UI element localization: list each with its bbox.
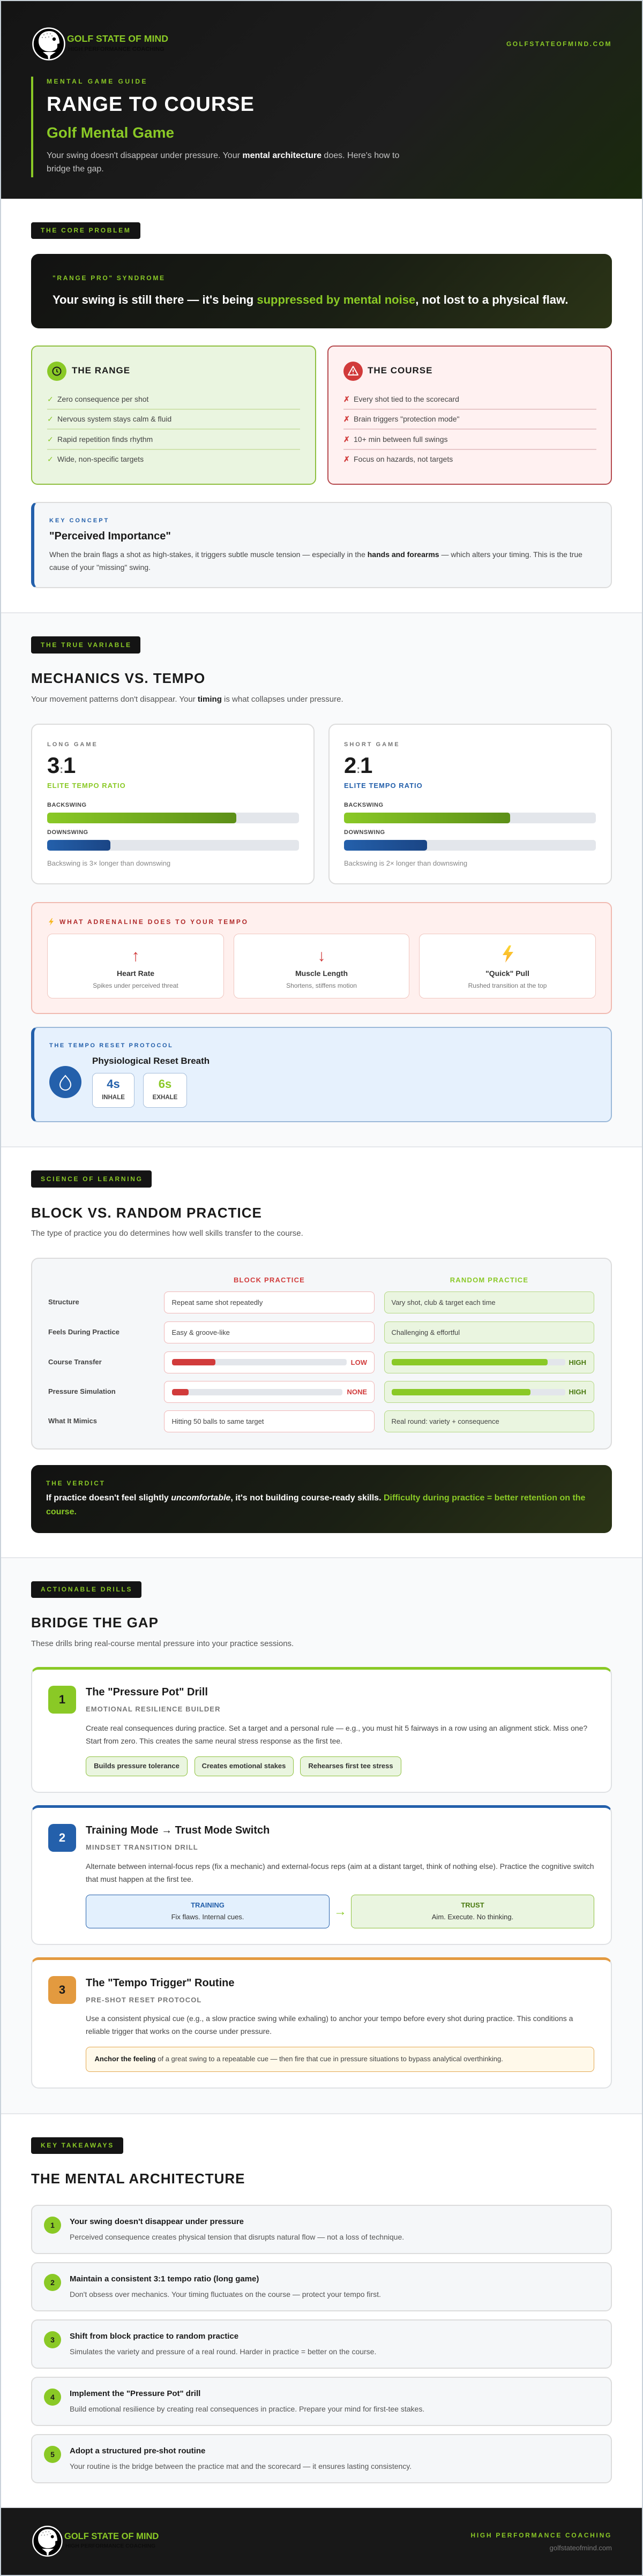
row: feels during practice: Challenging & effortful: [391, 1328, 460, 1336]
training mode box: TRAINING: [191, 1901, 225, 1909]
drill subtitle: PRE-SHOT RESET PROTOCOL: [86, 1996, 201, 2004]
chip: Builds pressure tolerance: [94, 1762, 180, 1770]
drill title: The "Pressure Pot" Drill: [86, 1686, 208, 1698]
cross list: [343, 395, 459, 463]
stat: inhale: 4s: [107, 1077, 120, 1091]
label: THE VERDICT: [46, 1479, 106, 1487]
number badge: [48, 1824, 76, 1852]
cross list: Focus on hazards, not targets: [354, 455, 453, 463]
trust mode box: [351, 1895, 594, 1928]
column header: random: RANDOM PRACTICE: [450, 1276, 528, 1284]
drill 1: [31, 1667, 612, 1793]
callout statement: Your swing is still there — it's being suppressed by mental noise, not lost to a physical flaw.: [53, 293, 568, 306]
panel title: THE RANGE: [72, 365, 130, 375]
ratio caption: ELITE TEMPO RATIO: [344, 782, 423, 790]
takeaway 1: 1: [50, 2221, 55, 2229]
heading: THE MENTAL ARCHITECTURE: [31, 2171, 245, 2187]
card: heart rate: [47, 934, 224, 998]
panel title: WHAT ADRENALINE DOES TO YOUR TEMPO: [59, 918, 249, 926]
takeaway 5: Your routine is the bridge between the practice mat and the scorecard — it ensures lasting consistency.: [70, 2462, 412, 2470]
takeaway 3: [31, 2319, 612, 2369]
number badge: 2: [59, 1831, 65, 1844]
kicker: MENTAL GAME GUIDE: [47, 78, 148, 85]
takeaway 4: 4: [50, 2393, 55, 2401]
logo: [32, 27, 168, 61]
section tag: [31, 1170, 152, 1188]
trust mode box: Aim. Execute. No thinking.: [432, 1913, 513, 1921]
check list: [47, 395, 171, 463]
section tag: THE TRUE VARIABLE: [41, 641, 132, 649]
takeaway 5: 5: [50, 2450, 55, 2459]
statement: If practice doesn't feel slightly uncomfortable, it's not building course-ready skills. Difficulty during practice = better retention on the: [46, 1493, 585, 1503]
takeaway 5: Adopt a structured pre-shot routine: [70, 2446, 205, 2455]
section: the true variable: [1, 612, 642, 1146]
intro text: [47, 151, 399, 174]
panel: the range: [31, 346, 316, 485]
drill 2: [31, 1805, 612, 1945]
takeaway 4: Build emotional resilience by creating real consequences in practice. Prepare your mind for first-tee stakes.: [70, 2405, 424, 2413]
check list: ✓: [47, 435, 54, 444]
section tag: [31, 1581, 141, 1598]
footer logo: [32, 2526, 159, 2557]
row: what it mimics: [48, 1410, 594, 1432]
note: Backswing is 2× longer than downswing: [344, 859, 467, 867]
takeaway 2: 2: [50, 2278, 55, 2287]
main title: RANGE TO COURSE: [47, 93, 255, 116]
logo tagline: HIGH PERFORMANCE COACHING: [65, 2543, 155, 2549]
stat: inhale: [92, 1073, 134, 1108]
stat: inhale: INHALE: [102, 1094, 125, 1101]
intro text: Your swing doesn't disappear under pressure. Your mental architecture does. Here's how to: [47, 151, 399, 160]
cross list: ✗: [343, 455, 350, 463]
drill body: that must happen at the first tee.: [86, 1875, 193, 1883]
section tag: ACTIONABLE DRILLS: [41, 1586, 132, 1593]
card: quick pull: [419, 934, 596, 998]
chip: Rehearses first tee stress: [308, 1762, 393, 1770]
icon: breath drop: [49, 1066, 81, 1098]
card title: Muscle Length: [295, 969, 348, 978]
drill body: Alternate between internal-focus reps (fix a mechanic) and external-focus reps (aim at a distant target, think of nothing else). Practice the cognitive switch: [86, 1862, 594, 1871]
takeaway 1: [31, 2205, 612, 2254]
takeaway 5: [31, 2434, 612, 2483]
cross list: Brain triggers "protection mode": [354, 415, 459, 423]
stat: exhale: 6s: [159, 1077, 171, 1091]
note: Backswing is 3× longer than downswing: [47, 859, 170, 867]
website link: GOLFSTATEOFMIND.COM: [506, 40, 612, 48]
section: science of learning: [1, 1146, 642, 1557]
row: what it mimics: Real round: variety + consequence: [391, 1417, 499, 1425]
card title: "Quick" Pull: [485, 969, 529, 978]
check list: ✓: [47, 395, 54, 403]
row: structure: [48, 1291, 594, 1313]
row: pressure simulation: HIGH: [569, 1388, 586, 1396]
row: course transfer: Course Transfer: [48, 1357, 102, 1366]
backswing bar: [47, 813, 299, 823]
body text: cause of your "missing" swing.: [49, 563, 151, 572]
column header: block: BLOCK PRACTICE: [234, 1276, 305, 1284]
drill body: [86, 1862, 594, 1883]
row: course transfer: LOW: [351, 1358, 367, 1366]
cross list: Every shot tied to the scorecard: [354, 395, 459, 403]
intro text: Your movement patterns don't disappear. Your timing is what collapses under pressure.: [31, 695, 343, 704]
row: structure: Vary shot, club & target each time: [391, 1298, 496, 1306]
chip: [194, 1756, 294, 1776]
body text: [49, 550, 582, 572]
icon: clock: [47, 362, 66, 381]
card: muscle length: [234, 934, 409, 998]
comparison table: [31, 1258, 612, 1450]
drill body: Create real consequences during practice. Set a target and a personal rule — e.g., you must hit 5 fairways in a row using an alignment stick. Miss one?: [86, 1724, 587, 1732]
drill body: reliable trigger that works on the course under pressure.: [86, 2027, 272, 2036]
section tag: THE CORE PROBLEM: [41, 227, 131, 234]
row: what it mimics: Hitting 50 balls to same target: [171, 1417, 264, 1425]
icon: golf ball head on tee: [32, 2526, 63, 2557]
check list: Rapid repetition finds rhythm: [57, 435, 153, 444]
section tag: SCIENCE OF LEARNING: [41, 1175, 143, 1183]
footer website: golfstateofmind.com: [550, 2544, 612, 2552]
subtitle: Golf Mental Game: [47, 124, 174, 141]
drill title: Training Mode → Trust Mode Switch: [86, 1824, 270, 1836]
drill 3: [31, 1957, 612, 2089]
panel title: THE COURSE: [368, 365, 432, 375]
label: SHORT GAME: [344, 741, 400, 748]
row: feels during practice: Easy & groove-like: [171, 1328, 230, 1336]
callout: range pro syndrome: [31, 254, 612, 328]
cross list: ✗: [343, 435, 350, 444]
label: THE TEMPO RESET PROTOCOL: [49, 1042, 174, 1049]
intro text: bridge the gap.: [47, 164, 104, 174]
heading: MECHANICS VS. TEMPO: [31, 670, 205, 686]
takeaway 4: Implement the "Pressure Pot" drill: [70, 2389, 200, 2398]
takeaway 3: 3: [50, 2335, 55, 2344]
number badge: 1: [59, 1693, 65, 1706]
row: course transfer: [48, 1351, 594, 1373]
takeaway 2: Maintain a consistent 3:1 tempo ratio (long game): [70, 2274, 259, 2284]
card title: Heart Rate: [117, 969, 154, 978]
takeaway 2: [31, 2262, 612, 2311]
title: Physiological Reset Breath: [92, 1056, 210, 1066]
callout: the verdict: [31, 1465, 612, 1533]
training mode box: [86, 1895, 330, 1928]
intro text: These drills bring real-course mental pressure into your practice sessions.: [31, 1639, 294, 1648]
section: actionable drills: [1, 1557, 642, 2113]
backswing label: BACKSWING: [47, 802, 87, 808]
footer tagline: HIGH PERFORMANCE COACHING: [470, 2532, 612, 2539]
takeaway 3: Simulates the variety and pressure of a real round. Harder in practice = better on the course.: [70, 2347, 376, 2356]
row: course transfer: HIGH: [569, 1358, 586, 1366]
section tag: KEY TAKEAWAYS: [41, 2142, 114, 2149]
row: feels during practice: Feels During Practice: [48, 1328, 119, 1336]
panel: long game tempo: [31, 724, 315, 884]
stat: exhale: [143, 1073, 187, 1108]
drill body: [86, 2014, 573, 2036]
backswing bar: [344, 813, 596, 823]
footer: [1, 2507, 642, 2575]
section tag: [31, 636, 140, 654]
panel: the course: [327, 346, 612, 485]
header: [1, 1, 642, 199]
backswing label: BACKSWING: [344, 802, 384, 808]
row: structure: Structure: [48, 1298, 79, 1306]
icon: arrow down: ↓: [317, 947, 326, 965]
icon: warning: [343, 362, 363, 381]
row: pressure simulation: NONE: [347, 1388, 367, 1396]
ratio: 3:1: [47, 753, 76, 778]
number badge: 3: [59, 1983, 65, 1996]
logo wordmark: GOLF STATE OF MIND: [67, 33, 168, 44]
row: what it mimics: What It Mimics: [48, 1417, 97, 1425]
section: the core problem: [1, 199, 642, 612]
check list: Nervous system stays calm & fluid: [57, 415, 171, 423]
section: key takeaways: [1, 2113, 642, 2507]
drill body: [86, 1724, 587, 1745]
panel: short game tempo: [328, 724, 612, 884]
logo tagline: HIGH PERFORMANCE COACHING: [68, 46, 165, 52]
cross list: ✗: [343, 395, 350, 403]
takeaway 1: Your swing doesn't disappear under pressure: [70, 2217, 244, 2226]
drill title: The "Tempo Trigger" Routine: [86, 1977, 235, 1989]
card text: Spikes under perceived threat: [93, 982, 178, 989]
takeaway 2: Don't obsess over mechanics. Your timing fluctuates on the course — protect your tempo first.: [70, 2290, 381, 2299]
check list: Wide, non-specific targets: [57, 455, 144, 463]
callout label: "RANGE PRO" SYNDROME: [53, 274, 166, 282]
chip: [86, 1756, 188, 1776]
row: pressure simulation: [48, 1381, 594, 1403]
heading: "Perceived Importance": [49, 530, 171, 542]
drill subtitle: EMOTIONAL RESILIENCE BUILDER: [86, 1705, 221, 1713]
downswing bar: [344, 840, 596, 851]
number badge: [48, 1976, 76, 2004]
drill subtitle: MINDSET TRANSITION DRILL: [86, 1843, 198, 1851]
number badge: [48, 1686, 76, 1714]
stat: exhale: EXHALE: [153, 1094, 177, 1101]
chip: [300, 1756, 401, 1776]
drill body: Start from zero. This creates the same neural stress response as the first tee.: [86, 1737, 342, 1745]
icon: lightning bolt: [503, 945, 513, 963]
panel: what adrenaline does: [31, 902, 612, 1014]
label: KEY CONCEPT: [49, 517, 109, 524]
intro text: The type of practice you do determines how well skills transfer to the course.: [31, 1229, 303, 1238]
hero block: [31, 77, 406, 177]
ratio caption: ELITE TEMPO RATIO: [47, 782, 126, 790]
cross list: 10+ min between full swings: [354, 435, 448, 444]
row: feels during practice: [48, 1321, 594, 1343]
downswing label: DOWNSWING: [47, 829, 88, 836]
check list: Zero consequence per shot: [57, 395, 148, 403]
takeaway 3: Shift from block practice to random practice: [70, 2332, 238, 2341]
row: structure: Repeat same shot repeatedly: [171, 1298, 263, 1306]
drill body: Use a consistent physical cue (e.g., a slow practice swing while exhaling) to anchor your tempo before every shot during practice. This conditions a: [86, 2014, 573, 2023]
label: LONG GAME: [47, 741, 98, 748]
callout note: [86, 2047, 594, 2072]
statement: [46, 1493, 585, 1516]
logo wordmark: GOLF STATE OF MIND: [64, 2532, 159, 2541]
chip: Creates emotional stakes: [202, 1762, 286, 1770]
ratio: 2:1: [344, 753, 372, 778]
statement: course.: [46, 1507, 77, 1516]
card text: Shortens, stiffens motion: [286, 982, 357, 989]
downswing bar: [47, 840, 299, 851]
card text: Rushed transition at the top: [468, 982, 547, 989]
check list: ✓: [47, 455, 54, 463]
downswing label: DOWNSWING: [344, 829, 385, 836]
panel: tempo reset protocol: [31, 1027, 612, 1122]
trust mode box: TRUST: [461, 1901, 484, 1909]
icon: golf ball head on tee: [32, 27, 65, 61]
check list: ✓: [47, 415, 54, 423]
icon: arrow up: ↑: [132, 947, 139, 965]
takeaway 4: [31, 2377, 612, 2426]
cross list: ✗: [343, 415, 350, 423]
takeaway 1: Perceived consequence creates physical tension that disrupts natural flow — not a loss of technique.: [70, 2233, 404, 2241]
section tag: [31, 2137, 123, 2154]
panel: key concept: [31, 502, 612, 588]
heading: BRIDGE THE GAP: [31, 1614, 159, 1631]
training mode box: Fix flaws. Internal cues.: [171, 1913, 244, 1921]
row: pressure simulation: Pressure Simulation: [48, 1387, 116, 1395]
icon: small bolt: [49, 918, 54, 926]
section tag: [31, 222, 140, 239]
heading: BLOCK VS. RANDOM PRACTICE: [31, 1205, 262, 1221]
body text: When the brain flags a shot as high-stakes, it triggers subtle muscle tension — especially in the hands and forearms — which alters your timing. This is the true: [49, 550, 582, 559]
callout note: Anchor the feeling of a great swing to a repeatable cue — then fire that cue in pressure situations to bypass analytical overthinking.: [94, 2055, 503, 2063]
arrow: →: [334, 1904, 347, 1919]
